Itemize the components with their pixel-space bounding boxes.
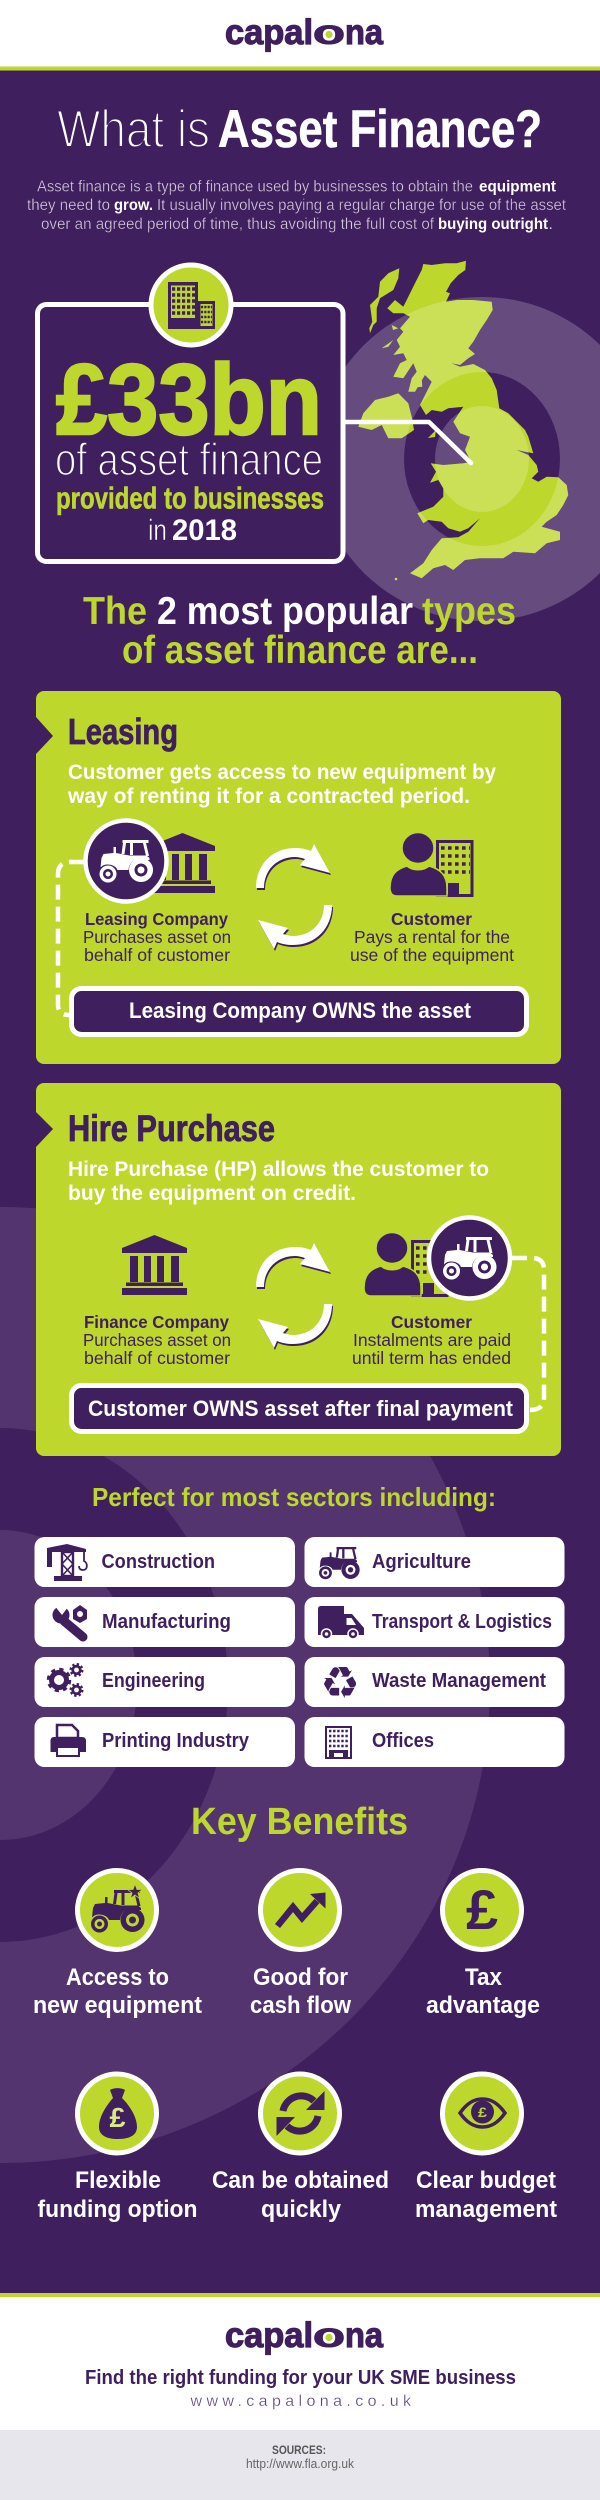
header band with logo: o [312, 13, 346, 52]
benefit: clear budget: £ [478, 2104, 487, 2120]
benefit: tax advantage: £ [466, 1878, 498, 1941]
callout: leasing ownership [72, 988, 526, 1034]
panel: hire purchase [36, 1083, 561, 1456]
sector: waste management: Waste Management [372, 1670, 546, 1692]
intro paragraph [27, 178, 567, 233]
sources panel: http://www.fla.org.uk [246, 2457, 355, 2471]
sector: offices [304, 1717, 564, 1767]
sector: construction: Construction [102, 1551, 215, 1573]
sources panel: SOURCES: [272, 2445, 326, 2457]
sector: agriculture: Agriculture [372, 1551, 471, 1573]
connector line to map [345, 422, 471, 463]
sector: engineering: Engineering [102, 1670, 205, 1692]
stat sublabel: provided to businesses [56, 480, 324, 516]
intro paragraph: It usually involves paying a regular charge for use of the asset [157, 197, 567, 214]
stat panel: 33bn [38, 265, 471, 562]
title: Asset Finance? [218, 100, 542, 159]
UK map with target rings [316, 261, 600, 621]
benefit: access to new equipment: new equipment [33, 1992, 202, 2019]
sector: agriculture [304, 1537, 564, 1587]
customer label: Customer [391, 1312, 472, 1332]
callout: customer ownership [72, 1386, 526, 1432]
heading: types of asset finance: The [83, 590, 147, 633]
sector: printing: Printing Industry [102, 1730, 250, 1752]
footer website: www.capalona.co.uk [190, 2393, 412, 2410]
benefit: tax advantage: advantage [426, 1992, 540, 2019]
sector: waste management [304, 1657, 564, 1709]
intro paragraph: they need to [27, 197, 110, 214]
leasing description: Customer gets access to new equipment by [68, 761, 496, 784]
sector: offices: Offices [372, 1730, 434, 1752]
footer [0, 2293, 600, 2500]
finance company label: behalf of customer [84, 1348, 230, 1368]
intro paragraph: grow. [114, 197, 153, 214]
heading: types of asset finance: types [422, 590, 516, 633]
customer label: use of the equipment [350, 945, 514, 965]
benefit: flexible funding: £ [110, 2102, 126, 2133]
benefit: flexible funding: funding option [38, 2196, 198, 2223]
icon: bank [122, 1235, 187, 1295]
icon: tractor in circle [429, 1218, 510, 1298]
benefit: clear budget [415, 2074, 557, 2223]
header band with logo [0, 0, 600, 70]
dashed ownership link [512, 1258, 544, 1410]
stat label: of asset finance [55, 434, 323, 485]
panel: key benefits [33, 1870, 557, 2223]
hire purchase description: Hire Purchase (HP) allows the customer to [68, 1158, 489, 1181]
benefit: flexible funding: Flexible [75, 2167, 161, 2194]
footer logo: na [345, 2316, 383, 2355]
big number: £33bn [56, 344, 322, 456]
title [57, 100, 542, 159]
footer logo [225, 2316, 383, 2355]
footer tagline: Find the right funding for your UK SME business [85, 2367, 516, 2389]
callout: leasing ownership: Leasing Company OWNS the asset [129, 998, 472, 1023]
leasing company label [83, 909, 231, 965]
hire purchase description: buy the equipment on credit. [68, 1182, 356, 1205]
header band with logo: na [345, 13, 383, 52]
heading: types of asset finance [83, 590, 516, 672]
icon: tractor in circle [86, 820, 166, 902]
callout: customer ownership: Customer OWNS asset after final payment [88, 1396, 514, 1421]
customer label [352, 1312, 511, 1368]
footer logo: capal [225, 2316, 313, 2355]
sector: engineering [34, 1657, 295, 1707]
heading: types of asset finance: of asset finance are... [122, 629, 478, 672]
intro paragraph: Asset finance is a type of finance used by businesses to obtain the [37, 178, 473, 196]
sector: transport [304, 1597, 564, 1647]
finance company label: Purchases asset on [83, 1330, 231, 1350]
panel: sectors grid [34, 1537, 564, 1767]
sources panel [0, 2430, 600, 2500]
benefit: cash flow [250, 1870, 351, 2019]
sector: waste management: ♻ [320, 1658, 360, 1709]
customer label: Pays a rental for the [354, 927, 510, 947]
icon: exchange arrows [256, 844, 333, 951]
heading: sectors: Perfect for most sectors including: [92, 1482, 496, 1512]
leasing description [67, 761, 496, 808]
icon: office buildings [151, 265, 231, 345]
sector: construction [34, 1537, 295, 1587]
intro paragraph: buying outright [438, 216, 548, 233]
customer label: Customer [391, 909, 472, 929]
header band with logo: capal [225, 13, 313, 52]
icon: customer [364, 1232, 447, 1296]
leasing company label: Leasing Company [85, 909, 228, 929]
hire purchase description [68, 1158, 489, 1205]
intro paragraph: equipment [479, 178, 556, 196]
benefit: access to new equipment: Access to [66, 1964, 169, 1991]
benefit: obtained quickly: Can be obtained [212, 2167, 389, 2194]
leasing heading: Leasing [68, 711, 178, 752]
finance company label: Finance Company [84, 1312, 229, 1332]
leasing description: way of renting it for a contracted period. [67, 785, 470, 808]
stat year: 2018 [172, 514, 237, 547]
benefit: clear budget: management [415, 2196, 557, 2223]
customer label [350, 909, 514, 965]
intro paragraph: over an agreed period of time, thus avoiding the full cost of [41, 216, 435, 233]
benefit: obtained quickly: quickly [261, 2196, 342, 2223]
decorative background rings [0, 1207, 490, 2163]
dashed ownership link [58, 862, 84, 1015]
hire purchase heading: Hire Purchase [68, 1108, 275, 1149]
sector: manufacturing: Manufacturing [102, 1611, 231, 1633]
benefit: access to new equipment [33, 1870, 202, 2019]
icon: customer [390, 832, 472, 896]
sector: printing [34, 1717, 295, 1767]
benefit: tax advantage: Tax [465, 1964, 503, 1991]
leasing company label: Purchases asset on [83, 927, 231, 947]
benefit: cash flow: Good for [253, 1964, 348, 1991]
benefit: tax advantage [426, 1870, 540, 2019]
panel: leasing [36, 691, 561, 1064]
customer label: until term has ended [352, 1348, 511, 1368]
intro paragraph: . [548, 216, 553, 233]
title: What is [57, 100, 210, 159]
heading: key benefits: Key Benefits [191, 1801, 408, 1843]
benefit: obtained quickly [212, 2074, 389, 2223]
sector: manufacturing [34, 1597, 295, 1647]
finance company label [83, 1312, 231, 1368]
benefit: clear budget: Clear budget [416, 2167, 556, 2194]
icon: exchange arrows [256, 1243, 333, 1350]
sector: transport: Transport & Logistics [372, 1611, 552, 1633]
stat year: in [148, 514, 167, 547]
leasing company label: behalf of customer [84, 945, 230, 965]
customer label: Instalments are paid [353, 1330, 511, 1350]
icon: bank [150, 833, 215, 893]
benefit: cash flow: cash flow [250, 1992, 351, 2019]
heading: types of asset finance: 2 most popular [157, 590, 413, 633]
benefit: flexible funding [38, 2074, 198, 2223]
footer logo: o [312, 2316, 346, 2355]
